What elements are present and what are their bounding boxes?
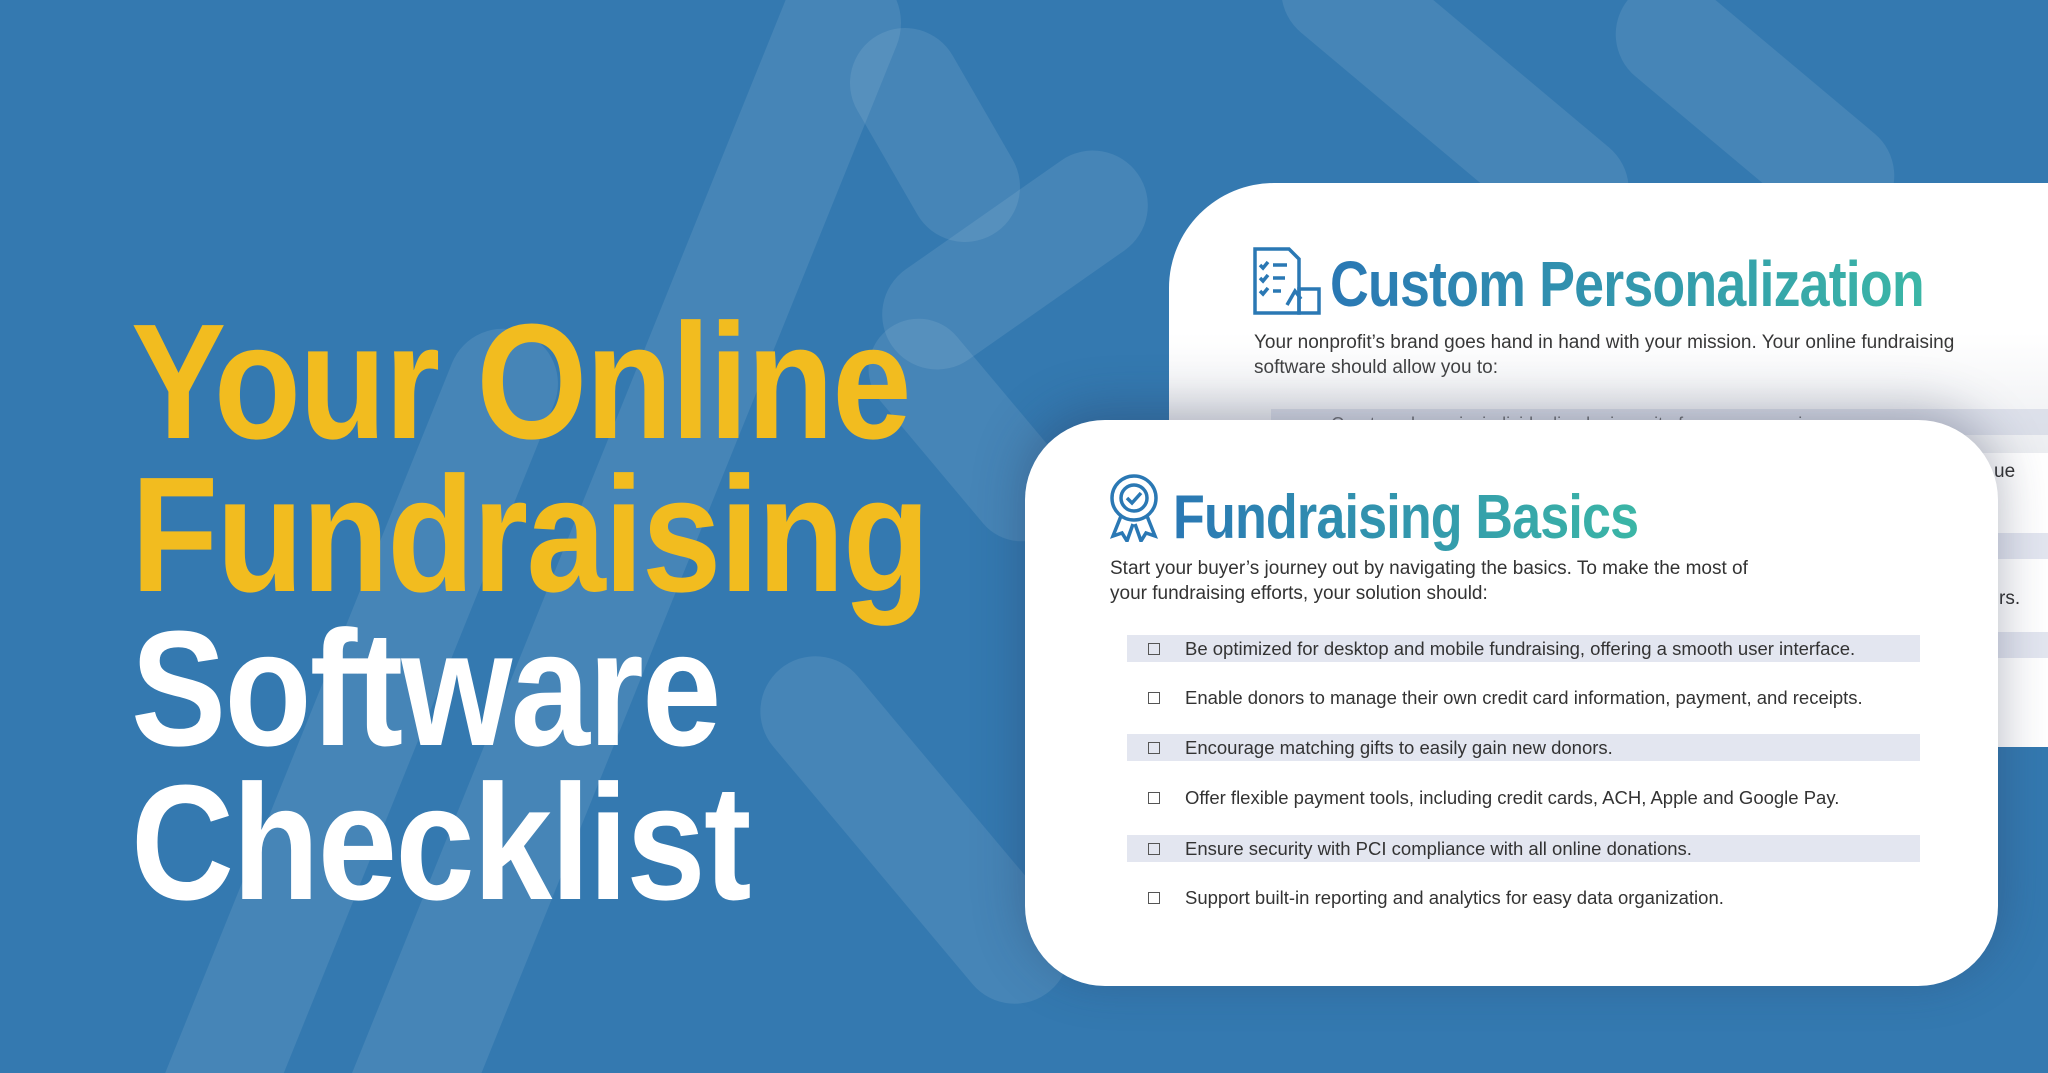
text block: Start your buyer’s journey out by navigating the basics. To make the most of [1110, 558, 1748, 579]
checklist item 4: Offer flexible payment tools, including credit cards, ACH, Apple and Google Pay. [1185, 787, 1839, 808]
heading: Fundraising Basics [1173, 483, 1638, 552]
title: Software [131, 597, 720, 780]
text block [1110, 558, 1748, 604]
icon: award badge [1110, 474, 1158, 542]
title: Fundraising [131, 443, 928, 626]
title [131, 290, 928, 934]
checklist rows partially hidden: Create a dynamic, individualized micro-site for your campaign. [1331, 414, 1827, 434]
heading: Custom Personalization [1330, 248, 1924, 320]
text block: software should allow you to: [1254, 357, 1498, 378]
checklist item 3: Encourage matching gifts to easily gain new donors. [1185, 737, 1613, 758]
title: Your Online [131, 290, 910, 473]
title: Checklist [131, 751, 750, 934]
checklist rows partially hidden [1271, 409, 2048, 435]
checklist item 6: Support built-in reporting and analytics for easy data organization. [1185, 887, 1724, 908]
text block: your fundraising efforts, your solution should: [1110, 583, 1488, 604]
text block: Your nonprofit’s brand goes hand in hand with your mission. Your online fundraising [1254, 332, 1954, 353]
checklist item 2: Enable donors to manage their own credit card information, payment, and receipts. [1185, 687, 1863, 708]
checklist item 3 [1127, 734, 1920, 761]
checklist item 1 [1127, 635, 1920, 662]
panel: fundraising basics (front card) [1025, 420, 1998, 986]
checklist item 5 [1127, 835, 1920, 862]
checklist item 1: Be optimized for desktop and mobile fundraising, offering a smooth user interface. [1185, 638, 1855, 659]
panel: custom personalization (back card): ue [1994, 461, 2015, 482]
panel: custom personalization (back card): rs. [1999, 588, 2020, 609]
text block [1254, 332, 1954, 378]
checklist item 5: Ensure security with PCI compliance with all online donations. [1185, 838, 1692, 859]
panel: custom personalization (back card) [1169, 183, 2048, 747]
icon: checklist document [1253, 247, 1321, 315]
